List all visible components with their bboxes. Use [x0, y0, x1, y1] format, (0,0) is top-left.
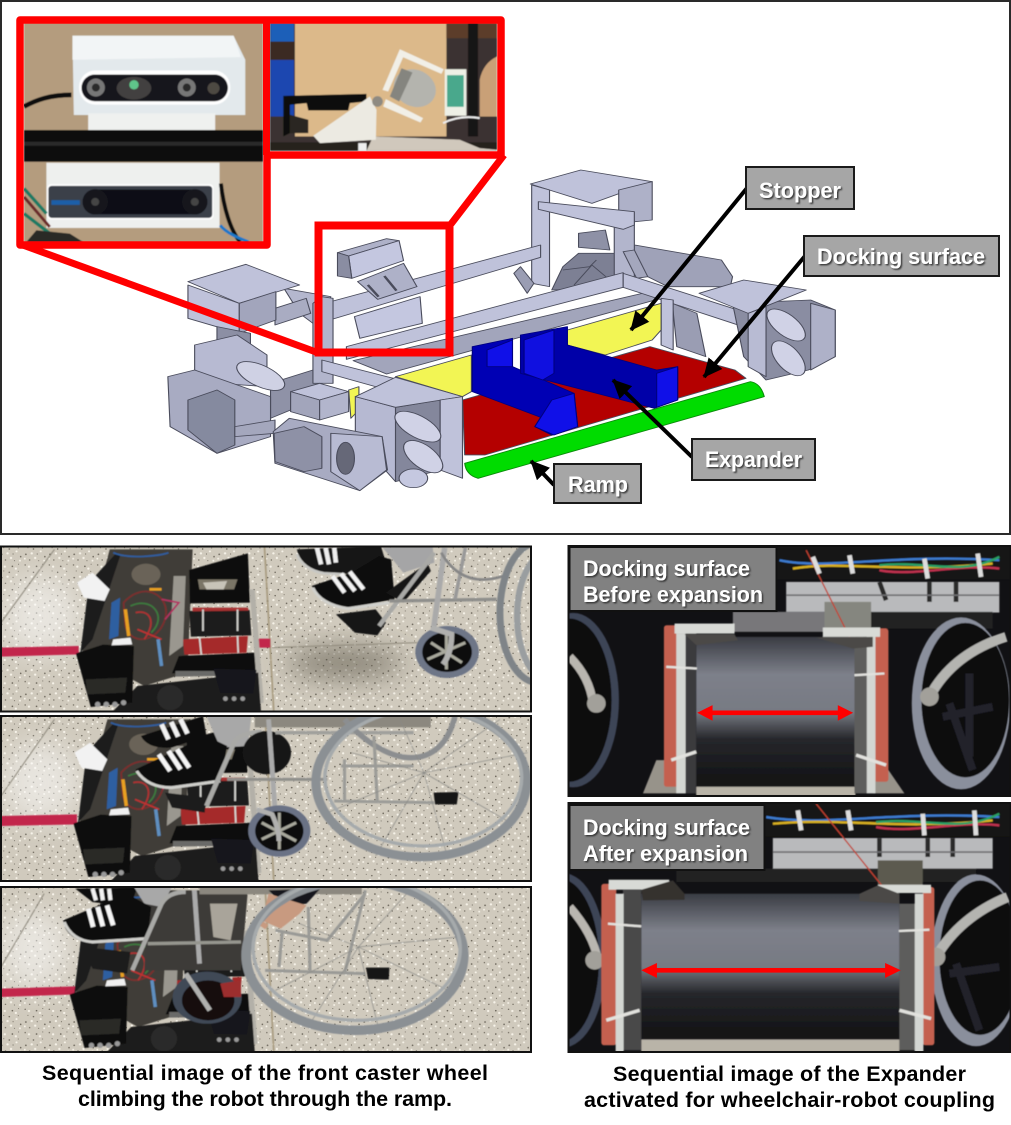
label: Ramp: Ramp: [568, 472, 628, 497]
yellow stopper surfaces: [349, 303, 661, 418]
caption: caster wheel sequence: Sequential image of the front caster wheel: [42, 1061, 488, 1085]
caption: expander sequence: Sequential image of the Expander: [613, 1062, 967, 1086]
label: docking surface before expansion: Before expansion: [583, 582, 763, 607]
callout arrows: [531, 188, 805, 485]
left rear unit: [168, 264, 333, 453]
label: Ramp: [554, 464, 641, 503]
label: docking surface before expansion: Docking surface: [583, 556, 750, 581]
arrow: width after expansion: [641, 963, 901, 978]
label: docking surface before expansion: [570, 547, 776, 611]
photo: robot with wheelchair approaching: [0, 539, 579, 1059]
label: docking surface after expansion: Docking surface: [583, 815, 750, 840]
frame rails: [331, 245, 748, 374]
label: Expander: [692, 439, 815, 480]
panel: expander sequence: [520, 546, 1011, 1052]
inset photo: depth camera side view: [270, 24, 497, 151]
photo: docking surface after expansion: [520, 803, 1011, 1052]
red zoom frame and connector lines: [20, 20, 504, 352]
caption: caster wheel sequence: [42, 1061, 488, 1111]
camera mount: [337, 239, 422, 338]
rear wheel and tower: [530, 170, 733, 290]
label: Docking surface: Docking surface: [817, 244, 985, 269]
photo: caster at ramp: [0, 707, 533, 886]
blue expander: [472, 327, 678, 435]
label: Docking surface: [804, 236, 999, 276]
photo: caster on ramp: [0, 877, 533, 1057]
inset photo: depth cameras front view: [24, 24, 263, 242]
arrow: width before expansion: [697, 705, 853, 721]
caption: caster wheel sequence: climbing the robot through the ramp.: [78, 1087, 452, 1111]
label: Expander: Expander: [705, 447, 802, 472]
caption: expander sequence: activated for wheelchair-robot coupling: [584, 1088, 995, 1112]
red docking surface: [462, 347, 746, 455]
label: docking surface after expansion: [570, 805, 764, 870]
label: docking surface after expansion: After expansion: [583, 841, 748, 866]
front left block: [291, 360, 393, 420]
caption: expander sequence: [584, 1062, 995, 1112]
panel: caster wheel climbing sequence: [0, 539, 579, 1059]
front motor and wheel unit: [273, 377, 462, 491]
CAD model of robot: [168, 170, 835, 491]
right wheel unit: [699, 280, 835, 380]
photo: docking surface before expansion: [527, 546, 1010, 796]
label: Stopper: Stopper: [759, 178, 841, 203]
green ramp: [465, 382, 764, 478]
label: Stopper: [746, 167, 854, 209]
